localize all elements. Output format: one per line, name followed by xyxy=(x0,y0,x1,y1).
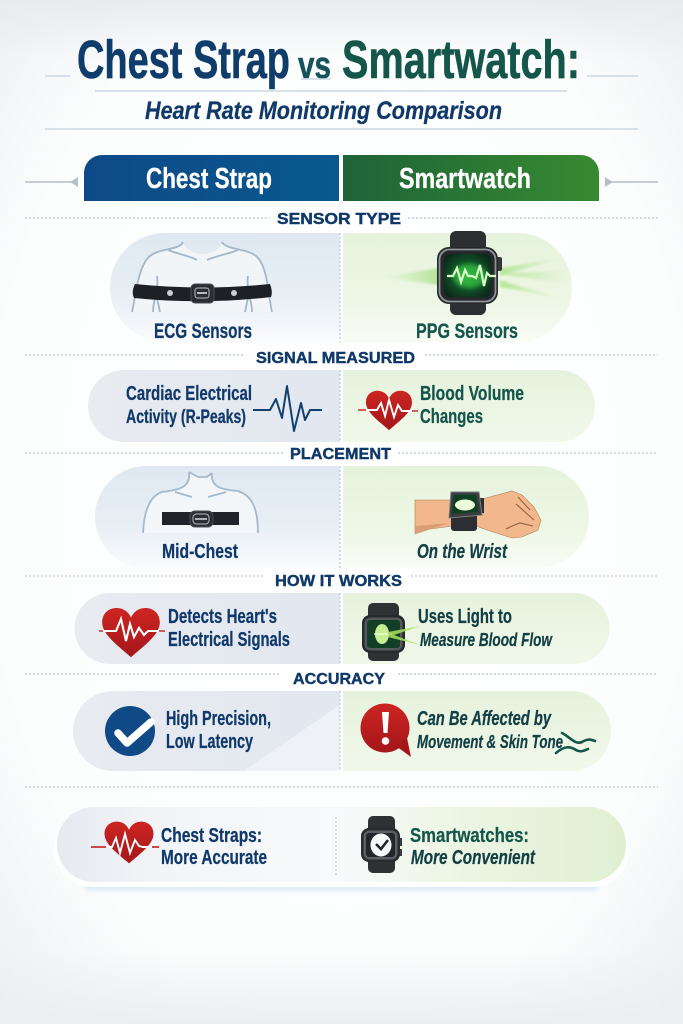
text: can be affected by movement & skin tone: Can Be Affected by xyxy=(417,708,552,730)
text: chest straps more accurate: More Accurate xyxy=(161,847,267,869)
icon: motion waves xyxy=(556,733,595,753)
label: mid-chest: Mid-Chest xyxy=(162,541,238,563)
text: uses light to measure blood flow xyxy=(418,606,553,650)
label: PPG sensors: PPG Sensors xyxy=(416,320,518,343)
panel: ECG sensors xyxy=(110,233,340,343)
text: smartwatches more convenient: More Convenient xyxy=(411,847,536,869)
icon: torso with chest strap xyxy=(132,242,272,312)
section heading: signal measured: SIGNAL MEASURED xyxy=(256,350,415,367)
header: chest strap xyxy=(84,155,339,201)
icon: hand with smartwatch xyxy=(415,491,541,538)
header: smartwatch xyxy=(343,155,599,201)
label: on the wrist: On the Wrist xyxy=(417,541,508,563)
text: uses light to measure blood flow: Measure Blood Flow xyxy=(420,630,553,650)
text: detects heart's electrical signals xyxy=(168,606,290,651)
panel: cardiac electrical activity xyxy=(88,370,340,442)
panel: PPG sensors xyxy=(343,231,572,343)
text: high precision, low latency xyxy=(166,708,271,753)
header: smartwatch: Smartwatch xyxy=(399,163,531,195)
label: ECG sensors: ECG Sensors xyxy=(154,320,252,343)
column headers xyxy=(84,155,599,201)
section heading: how it works: HOW IT WORKS xyxy=(275,573,402,590)
text: can be affected by movement & skin tone: Movement & Skin Tone xyxy=(417,732,563,752)
title xyxy=(77,30,580,90)
text: cardiac electrical activity: Activity (R-Peaks) xyxy=(126,407,246,428)
text: smartwatches more convenient: Smartwatches: xyxy=(410,825,529,847)
summary panel xyxy=(54,807,629,891)
title: Smartwatch: xyxy=(342,30,580,90)
text: blood volume changes: Changes xyxy=(420,406,483,428)
icon: heart with pulse xyxy=(91,822,159,863)
panel: can be affected xyxy=(343,691,611,771)
icon: watch with clock face xyxy=(361,816,402,873)
text: chest straps more accurate xyxy=(161,825,267,869)
icon: watch with light beams xyxy=(362,603,420,661)
section heading: placement: PLACEMENT xyxy=(290,446,392,463)
text: detects heart's electrical signals: Electrical Signals xyxy=(168,629,290,651)
icon: torso with mid-chest strap xyxy=(143,472,258,533)
summary: chest straps xyxy=(91,822,267,869)
panel: on the wrist xyxy=(343,466,589,568)
text: uses light to measure blood flow: Uses Light to xyxy=(418,606,512,628)
icon: check mark badge xyxy=(105,706,155,756)
panel: mid-chest xyxy=(95,466,340,568)
title: Chest Strap xyxy=(77,30,290,90)
text: blood volume changes xyxy=(420,383,524,428)
header: chest strap: Chest Strap xyxy=(146,163,272,195)
text: high precision, low latency: High Precision, xyxy=(166,708,271,730)
title: vs xyxy=(298,45,331,87)
icon: heart with pulse xyxy=(99,608,165,657)
icon: heart with pulse xyxy=(358,391,418,430)
subtitle: Heart Rate Monitoring Comparison xyxy=(145,97,502,125)
panel: high precision xyxy=(73,691,340,771)
icon: ECG trace xyxy=(253,386,322,431)
text: can be affected by movement & skin tone xyxy=(417,708,563,752)
panel: uses light xyxy=(343,593,610,664)
text: cardiac electrical activity: Cardiac Electrical xyxy=(126,383,252,405)
text: blood volume changes: Blood Volume xyxy=(420,383,524,405)
icon: smartwatch with green light xyxy=(380,231,570,315)
panel: detects electrical signals xyxy=(74,593,340,664)
text: cardiac electrical activity xyxy=(126,383,252,428)
text: chest straps more accurate: Chest Straps: xyxy=(161,825,262,847)
text: detects heart's electrical signals: Detects Heart's xyxy=(168,606,277,628)
text: high precision, low latency: Low Latency xyxy=(166,731,254,753)
summary: smartwatches xyxy=(361,816,536,873)
text: smartwatches more convenient xyxy=(410,825,536,869)
section heading: sensor type: SENSOR TYPE xyxy=(277,211,401,228)
icon: alert speech bubble xyxy=(360,704,411,757)
section heading: accuracy: ACCURACY xyxy=(293,671,386,688)
panel: blood volume changes xyxy=(343,370,595,442)
